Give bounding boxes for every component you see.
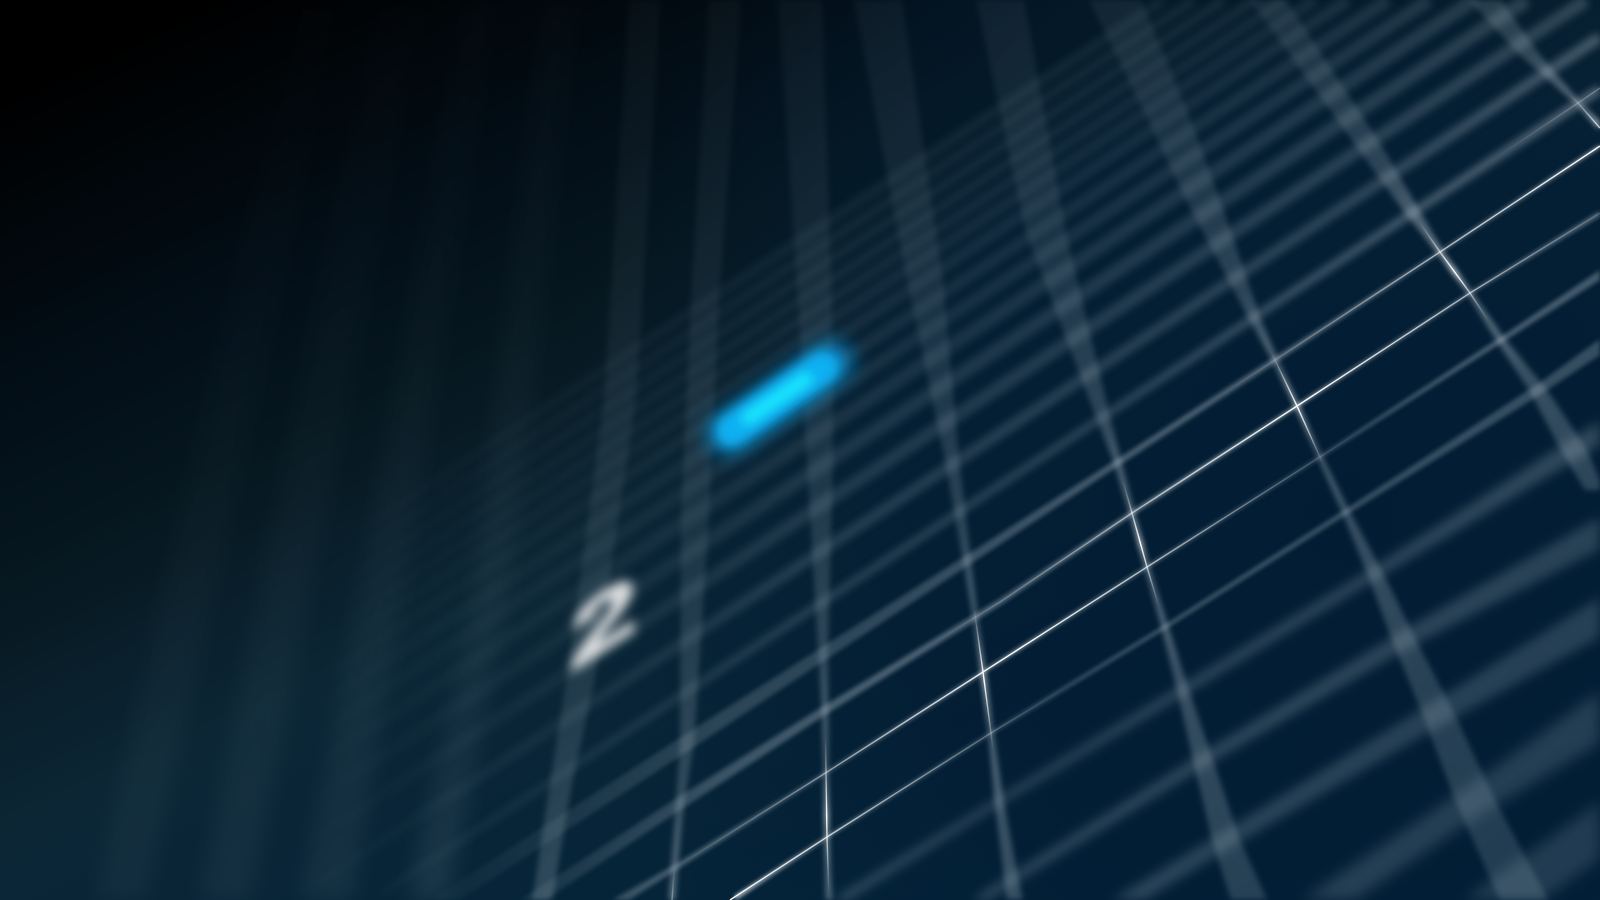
sharp in-focus line cores bbox=[672, 55, 1600, 900]
blurred digit 2: 2 bbox=[570, 553, 637, 690]
vertical grid lines far left bbox=[94, 0, 578, 900]
vertical grid lines bbox=[532, 0, 1600, 900]
cross lines near focus bbox=[430, 145, 1600, 900]
cross lines foreground heavily blurred bbox=[1302, 691, 1600, 900]
blurred blue dash bbox=[728, 362, 832, 434]
cross lines foreground blurred bbox=[835, 421, 1600, 900]
cross lines far blurred bbox=[504, 0, 1600, 812]
